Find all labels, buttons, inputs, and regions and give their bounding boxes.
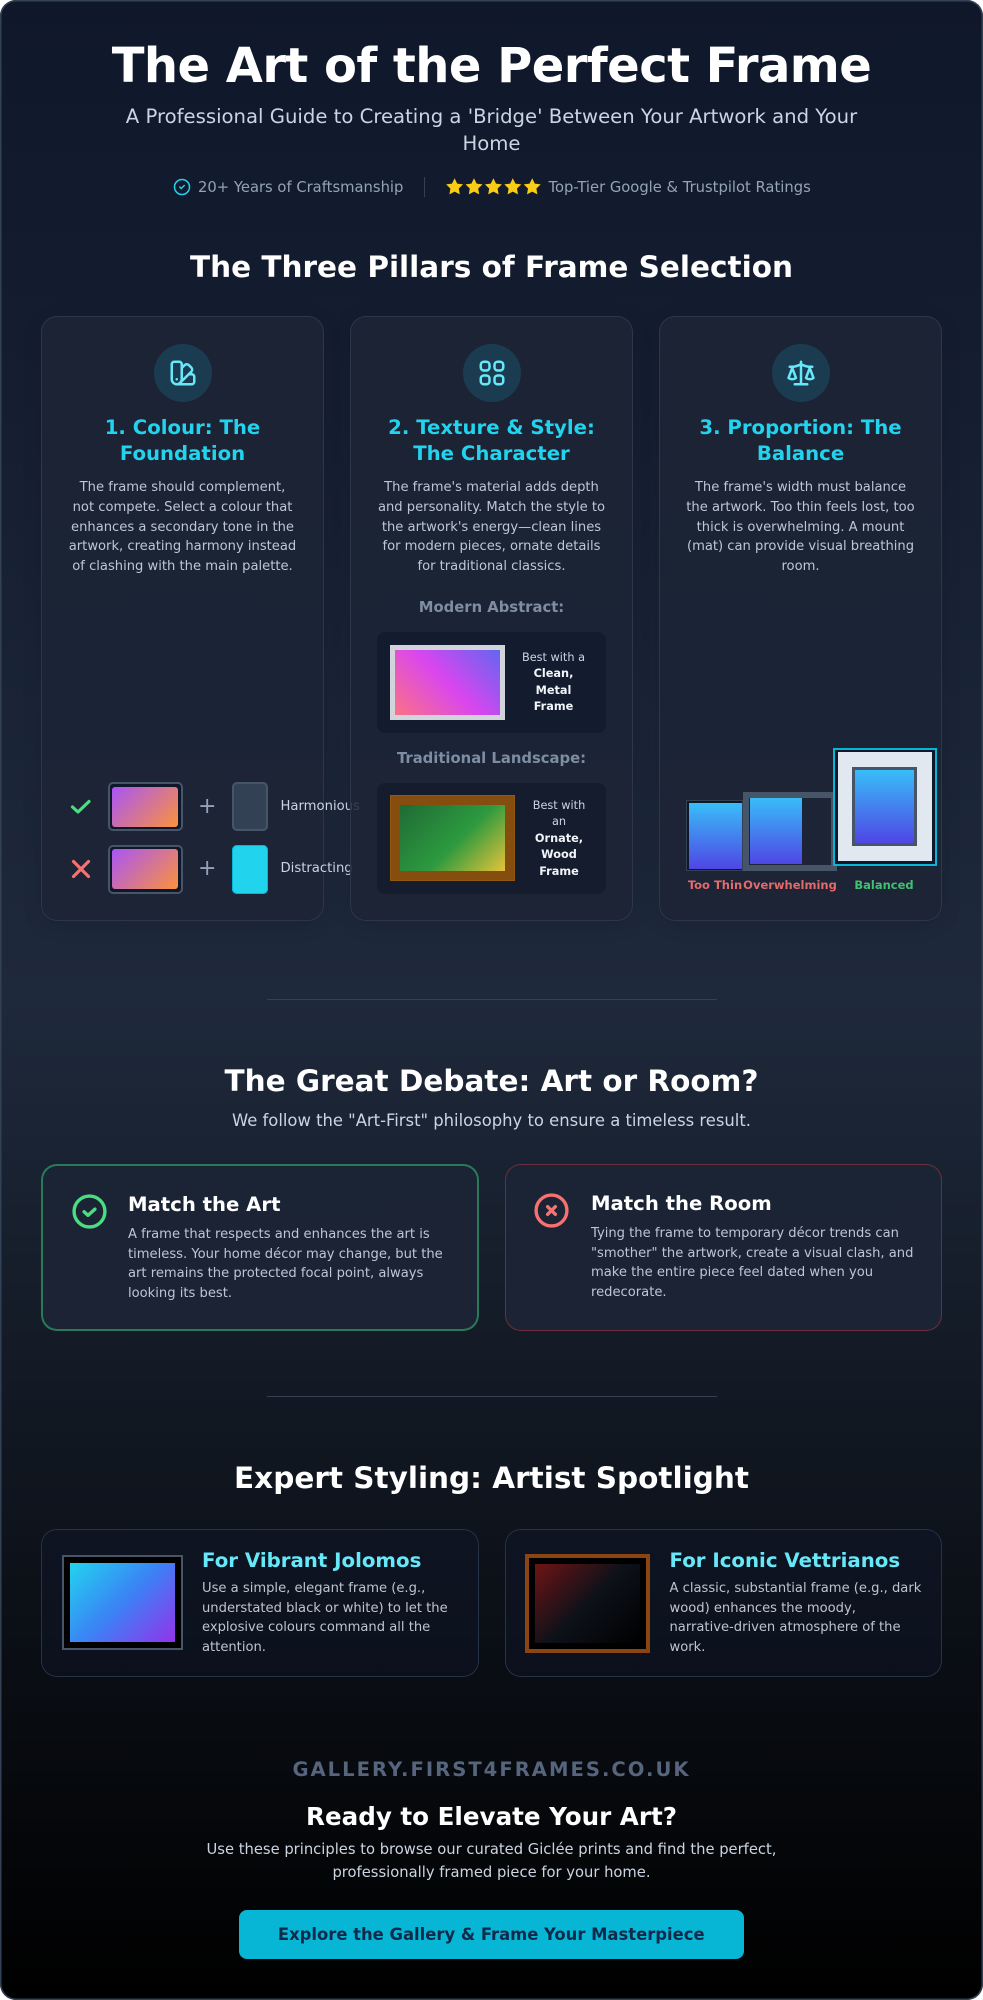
wood frame recommendation: Frame xyxy=(539,865,579,878)
match the room text: "smother" the artwork, create a visual clash, and xyxy=(591,1246,913,1261)
overwhelming frame example xyxy=(743,792,837,871)
vettriano framed artwork xyxy=(525,1554,650,1652)
colour text xyxy=(69,480,296,574)
wood frame recommendation xyxy=(533,799,585,878)
proportion text: (mat) can provide visual breathing xyxy=(687,539,914,554)
match the art text: timeless. Your home décor may change, but the xyxy=(128,1247,443,1262)
proportion heading xyxy=(699,416,902,465)
vettriano text: wood) enhances the moody, xyxy=(670,1601,856,1616)
colour text: artwork, creating harmony instead xyxy=(69,539,296,554)
panel: colour pillar xyxy=(41,316,324,921)
panel: match the art xyxy=(41,1164,478,1331)
icon: red circle cross xyxy=(534,1193,569,1228)
too thin label: Too Thin xyxy=(688,878,742,892)
texture heading: 2. Texture & Style: xyxy=(388,416,595,439)
distracting artwork thumbnail xyxy=(108,844,182,894)
plus sign: + xyxy=(198,856,216,881)
ratings text: Top-Tier Google & Trustpilot Ratings xyxy=(548,179,811,196)
balanced inner frame xyxy=(852,767,917,846)
wood frame recommendation: Ornate, xyxy=(535,832,583,845)
too thin artwork xyxy=(689,802,742,868)
panel: proportion pillar xyxy=(659,316,942,921)
modern frame recommendation: Best with a xyxy=(522,651,585,664)
icon: green check xyxy=(70,800,91,814)
traditional landscape example xyxy=(377,782,606,894)
debate subheading: We follow the "Art-First" philosophy to ensure a timeless result. xyxy=(232,1111,751,1130)
traditional landscape label: Traditional Landscape: xyxy=(397,750,586,766)
call to action text xyxy=(206,1840,776,1881)
harmonious swatch xyxy=(232,782,268,831)
match the art heading: Match the Art xyxy=(128,1193,280,1216)
colour text: of clashing with the main palette. xyxy=(72,559,293,574)
panel: vibrant jolomos xyxy=(41,1528,478,1677)
jolomo framed artwork xyxy=(62,1555,183,1650)
match the art text: A frame that respects and enhances the art is xyxy=(128,1227,430,1242)
icon: five gold stars xyxy=(446,178,541,194)
craftsmanship text: 20+ Years of Craftsmanship xyxy=(198,179,403,196)
proportion text: The frame's width must balance xyxy=(695,480,906,495)
heading: three pillars: The Three Pillars of Frame Selection xyxy=(190,250,793,284)
jolomo text: understated black or white) to let the xyxy=(202,1601,448,1616)
jolomo artwork xyxy=(70,1563,175,1642)
colour text: The frame should complement, xyxy=(80,480,285,495)
vettriano text xyxy=(670,1581,922,1655)
call to action button xyxy=(239,1910,744,1959)
proportion heading: Balance xyxy=(757,442,844,465)
proportion text: thick is overwhelming. A mount xyxy=(697,520,904,535)
modern frame recommendation: Metal xyxy=(536,684,571,697)
modern frame recommendation xyxy=(522,651,585,713)
texture text: and personality. Match the style to xyxy=(378,500,605,515)
call to action button: Explore the Gallery & Frame Your Masterpiece xyxy=(278,1925,705,1944)
modern frame recommendation: Frame xyxy=(534,700,573,713)
title: The Art of the Perfect Frame xyxy=(112,38,871,94)
subtitle: Home xyxy=(462,132,520,155)
texture text: The frame's material adds depth xyxy=(384,480,599,495)
modern frame recommendation: Clean, xyxy=(534,667,573,680)
vettriano text: A classic, substantial frame (e.g., dark xyxy=(670,1581,921,1596)
heading: expert styling: Expert Styling: Artist Spotlight xyxy=(234,1461,749,1495)
vettriano text: work. xyxy=(670,1640,705,1655)
icon: swatch book xyxy=(154,344,212,402)
colour text: enhances a secondary tone in the xyxy=(71,520,294,535)
too thin frame example xyxy=(686,800,743,871)
distracting swatch xyxy=(232,844,268,894)
match the room text: redecorate. xyxy=(591,1285,667,1300)
jolomo text: Use a simple, elegant frame (e.g., xyxy=(202,1581,425,1596)
subtitle: A Professional Guide to Creating a 'Bridge' Between Your Artwork and Your xyxy=(126,105,857,128)
harmonious artwork thumbnail xyxy=(108,782,182,831)
plus sign: + xyxy=(198,794,216,818)
match the art text xyxy=(128,1227,443,1301)
colour heading xyxy=(105,416,260,465)
footer call to action xyxy=(206,1758,776,1959)
heading: great debate: The Great Debate: Art or Room? xyxy=(224,1064,759,1098)
match the room text: Tying the frame to temporary décor trends can xyxy=(591,1226,899,1241)
texture text: for modern pieces, ornate details xyxy=(382,539,601,554)
gallery url: GALLERY.FIRST4FRAMES.CO.UK xyxy=(292,1758,691,1780)
metal framed artwork xyxy=(390,644,505,720)
modern abstract example xyxy=(377,632,606,732)
icon: grid xyxy=(462,344,520,402)
proportion heading: 3. Proportion: The xyxy=(699,416,902,439)
jolomo text: attention. xyxy=(202,1640,266,1655)
balanced label: Balanced xyxy=(854,878,914,892)
texture text: for traditional classics. xyxy=(417,559,566,574)
vettriano heading: For Iconic Vettrianos xyxy=(670,1549,900,1572)
header xyxy=(112,38,871,197)
jolomo text xyxy=(202,1581,448,1655)
texture text xyxy=(378,480,605,574)
subtitle xyxy=(126,105,858,155)
match the room text: make the entire piece feel dated when you xyxy=(591,1265,873,1280)
wood framed artwork xyxy=(390,795,515,881)
panel: match the room xyxy=(504,1164,942,1331)
icon: red cross xyxy=(72,860,90,878)
icon: craftsmanship check badge xyxy=(174,178,190,196)
call to action text: professionally framed piece for your home. xyxy=(332,1864,651,1881)
modern abstract label: Modern Abstract: xyxy=(419,598,564,616)
match the art text: looking its best. xyxy=(128,1286,232,1301)
proportion text: the artwork. Too thin feels lost, too xyxy=(686,500,915,515)
jolomo text: explosive colours command all the xyxy=(202,1620,430,1635)
wood frame recommendation: Wood xyxy=(541,848,577,861)
wood frame recommendation: Best with xyxy=(533,799,585,812)
harmonious label: Harmonious xyxy=(280,799,360,814)
texture text: the artwork's energy—clean lines xyxy=(382,520,601,535)
panel: iconic vettrianos xyxy=(504,1528,942,1677)
balanced mount xyxy=(838,752,932,861)
wood frame recommendation: an xyxy=(552,815,566,828)
colour heading: Foundation xyxy=(120,442,245,465)
overwhelming label: Overwhelming xyxy=(743,878,837,892)
panel: texture and style pillar xyxy=(350,316,633,921)
divider xyxy=(267,1396,717,1397)
overwhelming artwork xyxy=(750,798,802,864)
match the room heading: Match the Room xyxy=(591,1192,772,1215)
call to action text: Use these principles to browse our curated Giclée prints and find the perfect, xyxy=(206,1840,776,1858)
colour heading: 1. Colour: The xyxy=(105,416,260,439)
texture heading: The Character xyxy=(413,442,570,465)
vettriano artwork xyxy=(534,1564,640,1642)
jolomo heading: For Vibrant Jolomos xyxy=(202,1549,421,1572)
badge separator xyxy=(424,177,425,197)
match the room text xyxy=(590,1226,913,1300)
icon: green circle check xyxy=(72,1194,107,1229)
balanced frame example xyxy=(832,748,937,866)
match the art text: art remains the protected focal point, always xyxy=(128,1266,423,1281)
proportion text xyxy=(686,480,915,574)
balanced artwork xyxy=(855,770,914,843)
icon: balance scale xyxy=(772,344,830,402)
distracting label: Distracting xyxy=(280,860,353,876)
colour text: not compete. Select a colour that xyxy=(73,500,292,515)
texture heading xyxy=(388,416,595,465)
call to action heading: Ready to Elevate Your Art? xyxy=(306,1802,677,1831)
divider xyxy=(267,998,717,1000)
vettriano text: narrative-driven atmosphere of the xyxy=(670,1620,901,1635)
proportion text: room. xyxy=(781,559,820,574)
